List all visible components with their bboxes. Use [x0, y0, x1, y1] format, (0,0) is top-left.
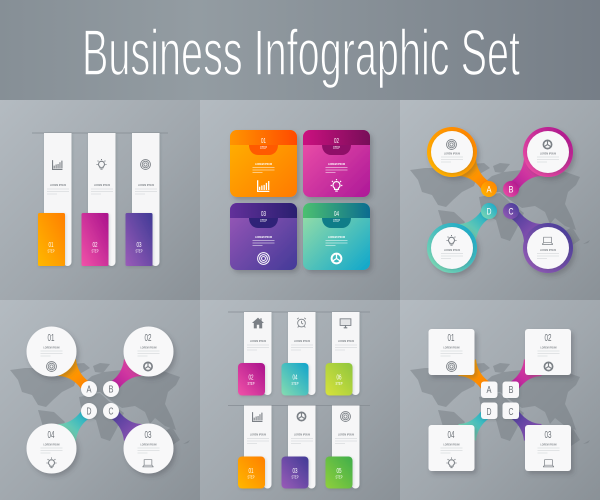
- step 02 tab: LOREM IPSUM: [250, 341, 266, 343]
- card 01: 01: [261, 136, 266, 145]
- step 01 strip: STEP: [48, 248, 54, 254]
- node D: D: [486, 206, 492, 218]
- node 02: B: [108, 384, 114, 396]
- step 04 tab: [282, 312, 316, 396]
- step 01 tab: LOREM IPSUM: [250, 434, 266, 436]
- node 01: A: [486, 385, 492, 396]
- node 02: B: [508, 385, 514, 396]
- node 01: LOREM IPSUM: [43, 348, 60, 350]
- step 06 tab: LOREM IPSUM: [338, 341, 354, 343]
- node 03: LOREM IPSUM: [140, 444, 157, 446]
- node B: B: [508, 184, 514, 196]
- panel: white square connectors: [400, 300, 600, 500]
- step 03 strip: STEP: [136, 248, 142, 254]
- node 03: C: [108, 406, 114, 418]
- node D: [427, 203, 497, 273]
- node 01: 01: [448, 333, 455, 344]
- panel: colored circle connectors: [400, 100, 600, 300]
- step 01 tab: STEP: [248, 474, 254, 480]
- step 06 tab: 06: [336, 374, 342, 382]
- panel: six vertical tabs: [200, 300, 400, 500]
- node 02: [502, 329, 571, 398]
- step 02 tab: 02: [248, 374, 254, 382]
- step 01 strip: [38, 133, 72, 266]
- node 04: [26, 403, 97, 474]
- step 01 strip: LOREM IPSUM: [50, 185, 66, 187]
- node C: [503, 203, 573, 273]
- node 03: LOREM IPSUM: [540, 444, 557, 446]
- card 03: LOREM IPSUM: [255, 236, 272, 239]
- card 04: [303, 203, 370, 270]
- node 04: LOREM IPSUM: [443, 444, 460, 446]
- card 02: [303, 130, 370, 197]
- node 02: LOREM IPSUM: [140, 348, 157, 350]
- node 02: [103, 326, 174, 397]
- node 01: A: [86, 384, 92, 396]
- node 01: LOREM IPSUM: [443, 348, 460, 350]
- step 04 tab: 04: [292, 374, 298, 382]
- card 01: STEP: [260, 145, 267, 150]
- node 04: 04: [448, 430, 455, 441]
- step 06 tab: [326, 312, 360, 396]
- panel: white circle connectors: [0, 300, 200, 500]
- node 04: [428, 402, 498, 471]
- step 01 tab: [238, 406, 272, 488]
- node B: [503, 127, 573, 197]
- node 04: D: [86, 406, 92, 418]
- step 05 tab: [326, 406, 360, 488]
- node D: LOREM IPSUM: [444, 250, 460, 252]
- step 03 tab: 03: [292, 468, 298, 475]
- node 03: C: [508, 407, 514, 418]
- card 04: STEP: [333, 218, 340, 223]
- card 02: 02: [334, 136, 339, 145]
- node 03: [502, 402, 571, 471]
- step 03 tab: STEP: [292, 474, 298, 480]
- card 03: [230, 203, 297, 270]
- node A: A: [486, 184, 492, 196]
- step 02 strip: [82, 133, 116, 266]
- step 03 strip: [126, 133, 160, 266]
- node 02: 02: [144, 333, 152, 344]
- node 04: D: [486, 407, 492, 418]
- card 01: LOREM IPSUM: [255, 163, 272, 166]
- step 05 tab: 05: [336, 468, 342, 475]
- step 02 strip: 02: [92, 242, 98, 249]
- card 02: LOREM IPSUM: [328, 163, 345, 166]
- node 04: 04: [48, 430, 55, 441]
- card 04: LOREM IPSUM: [328, 236, 345, 239]
- node 03: 03: [144, 430, 152, 441]
- node 01: [26, 326, 97, 397]
- step 03 tab: LOREM IPSUM: [294, 434, 310, 436]
- step 02 strip: LOREM IPSUM: [94, 185, 110, 187]
- node A: LOREM IPSUM: [444, 154, 460, 156]
- step 02 tab: STEP: [248, 381, 254, 386]
- step 01 tab: 01: [248, 468, 254, 475]
- node 04: LOREM IPSUM: [43, 444, 60, 446]
- step 02 strip: STEP: [92, 248, 98, 254]
- node 02: 02: [544, 333, 552, 344]
- node 01: [428, 329, 498, 398]
- panel: three vertical tabs: [0, 100, 200, 300]
- node C: LOREM IPSUM: [540, 250, 556, 252]
- step 03 tab: [282, 406, 316, 488]
- panel: four gradient cards: [200, 100, 400, 300]
- header band: [0, 0, 600, 100]
- step 05 tab: STEP: [336, 474, 342, 480]
- node A: [427, 127, 497, 197]
- card 01: [230, 130, 297, 197]
- node 01: 01: [48, 333, 55, 344]
- step 03 strip: LOREM IPSUM: [138, 185, 154, 187]
- step 02 tab: [238, 312, 272, 396]
- card 03: 03: [261, 209, 266, 218]
- node 02: LOREM IPSUM: [540, 348, 557, 350]
- card 03: STEP: [260, 218, 267, 223]
- step 04 tab: STEP: [292, 381, 298, 386]
- node 03: 03: [544, 430, 552, 441]
- card 04: 04: [334, 209, 339, 218]
- step 04 tab: LOREM IPSUM: [294, 341, 310, 343]
- step 01 strip: 01: [48, 242, 54, 249]
- node 03: [103, 403, 174, 474]
- step 05 tab: LOREM IPSUM: [338, 434, 354, 436]
- step 06 tab: STEP: [336, 381, 342, 386]
- node C: C: [508, 206, 514, 218]
- step 03 strip: 03: [136, 242, 142, 249]
- node B: LOREM IPSUM: [540, 154, 556, 156]
- card 02: STEP: [333, 145, 340, 150]
